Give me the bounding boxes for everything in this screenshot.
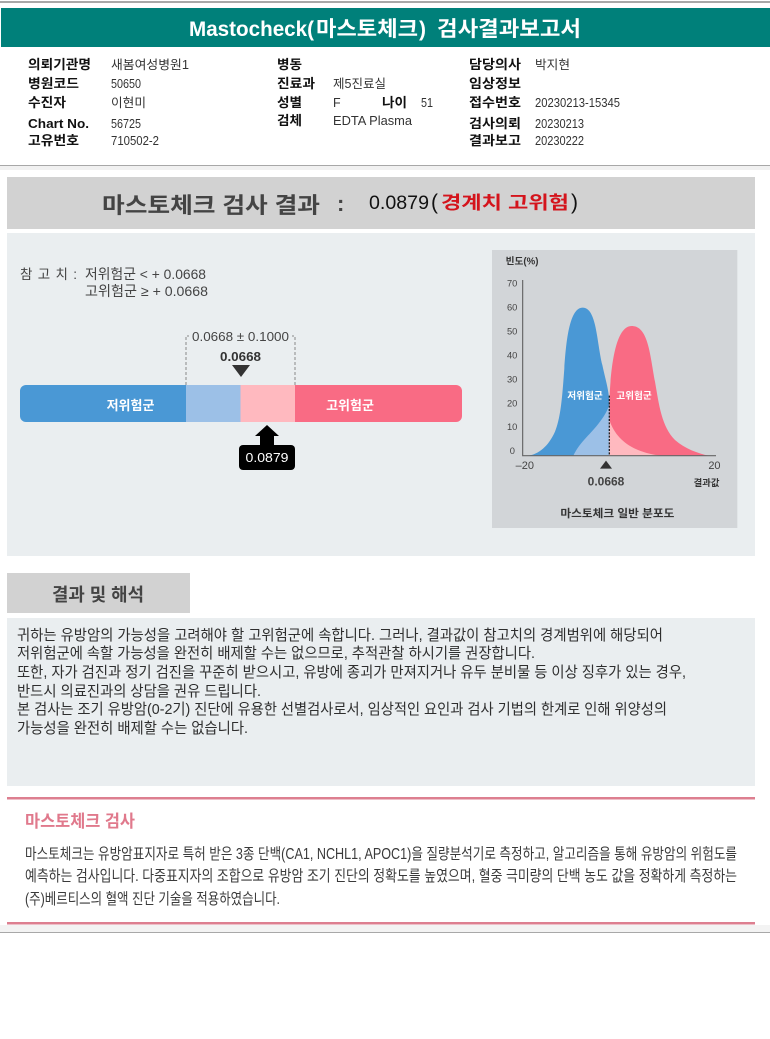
cutoff label — [588, 461, 625, 488]
result heading bar — [7, 177, 755, 229]
cutoff dotted line — [607, 396, 611, 456]
patient information table: 20230213 — [535, 117, 584, 131]
title banner — [1, 8, 770, 47]
distribution chart — [492, 250, 737, 528]
patient information table: 제5진료실 — [333, 77, 386, 91]
patient information table: 20230222 — [535, 134, 584, 148]
patient information table: Chart No. — [28, 116, 89, 131]
result marker arrow: 0.0879 — [246, 450, 288, 465]
low risk curve — [528, 308, 609, 456]
patient information table: 박지현 — [535, 58, 570, 72]
reference values text: 저위험군 < + 0.0668 — [85, 266, 206, 282]
about description: (주)베르티스의 혈액 진단 기술을 적용하였습니다. — [25, 890, 280, 908]
interpretation text panel — [7, 618, 755, 786]
high risk overlap — [609, 420, 660, 456]
title banner: Mastocheck( — [189, 18, 314, 41]
patient information table: 51 — [421, 96, 433, 110]
patient information table: 검사의뢰 — [469, 116, 521, 131]
curve labels: 저위험군 — [567, 390, 603, 402]
y axis labels: 0 — [510, 446, 515, 456]
interpretation text panel: 귀하는 유방암의 가능성을 고려해야 할 고위험군에 속합니다. 그러나, 결과값이 참고치의 경계범위에 해당되어 — [17, 627, 663, 644]
axis titles: –20 — [516, 460, 534, 472]
y axis labels: 20 — [507, 398, 517, 408]
cutoff label: 0.0668 — [588, 474, 625, 488]
y axis labels: 30 — [507, 374, 517, 384]
patient information table: 50650 — [111, 77, 141, 91]
result heading bar: 마스토체크 검사 결과 — [102, 193, 320, 218]
patient information table — [28, 57, 620, 148]
cutoff marker: 0.0668 — [220, 349, 261, 364]
patient information table: 검체 — [277, 113, 302, 128]
result heading bar: : — [337, 191, 344, 216]
title banner: 마스토체크 — [316, 18, 418, 41]
about description — [25, 845, 737, 908]
axis titles: 결과값 — [694, 477, 720, 488]
title banner: 검사결과보고서 — [437, 18, 581, 41]
low risk overlap — [573, 404, 609, 456]
patient information table: 20230213-15345 — [535, 96, 620, 110]
interpretation heading: 결과 및 해석 — [52, 585, 144, 605]
risk scale bar: 고위험군 — [326, 398, 374, 413]
patient information table: 56725 — [111, 117, 141, 131]
y axis labels: 50 — [507, 327, 517, 337]
about heading: 마스토체크 검사 — [25, 812, 135, 831]
patient information table: 병동 — [277, 57, 302, 72]
result marker arrow — [239, 425, 295, 470]
borderline range bracket — [186, 329, 295, 385]
patient information table: 임상정보 — [469, 76, 521, 91]
interpretation heading — [7, 573, 190, 613]
axis titles — [506, 256, 721, 488]
result heading bar: ( — [431, 191, 438, 214]
cutoff marker — [220, 349, 261, 377]
distribution chart: 고위험군 — [616, 390, 652, 402]
reference values text: 참 고 치 : — [20, 267, 77, 282]
interpretation text panel: 저위험군에 속할 가능성을 완전히 배제할 수는 없으므로, 추적관찰 하시기를 권장합니다. — [17, 645, 535, 662]
axis titles: 20 — [708, 460, 721, 472]
reference values text: 고위험군 ≥ + 0.0668 — [85, 283, 208, 299]
patient information table: 결과보고 — [469, 133, 521, 148]
y axis labels: 70 — [507, 279, 517, 289]
axis titles: 빈도(%) — [506, 256, 538, 268]
y axis labels — [507, 279, 517, 456]
interpretation text panel: 가능성을 완전히 배제할 수는 없습니다. — [17, 720, 248, 737]
patient information table: 병원코드 — [28, 76, 79, 91]
patient information table: 이현미 — [111, 96, 146, 110]
patient information table: 710502-2 — [111, 134, 159, 148]
y axis labels: 60 — [507, 303, 517, 313]
interpretation text panel: 본 검사는 조기 유방암(0-2기) 진단에 유용한 선별검사로서, 임상적인 요인과 검사 기법의 한계로 인해 위양성의 — [17, 701, 667, 718]
patient information table: 성별 — [277, 95, 302, 110]
patient information table: 의뢰기관명 — [28, 57, 91, 72]
result heading bar: 경계치 고위험 — [441, 193, 569, 213]
patient information table: 고유번호 — [28, 133, 79, 148]
patient information table: 접수번호 — [469, 95, 521, 110]
high risk curve — [609, 326, 708, 456]
interpretation text panel: 또한, 자가 검진과 정기 검진을 꾸준히 받으시고, 유방에 종괴가 만져지거나 유두 분비물 등 이상 징후가 있는 경우, — [17, 664, 686, 681]
borderline range bracket: 0.0668 ± 0.1000 — [192, 329, 289, 344]
title banner: ) — [419, 18, 426, 41]
chart caption: 마스토체크 일반 분포도 — [560, 507, 675, 520]
axes — [523, 280, 716, 456]
panel: result scale and distribution — [7, 233, 755, 556]
patient information table: F — [333, 96, 341, 110]
risk scale bar — [20, 385, 462, 422]
patient information table: 새봄여성병원1 — [111, 58, 189, 72]
interpretation text panel: 반드시 의료진과의 상담을 권유 드립니다. — [17, 683, 261, 700]
y axis labels: 40 — [507, 351, 517, 361]
patient information table: EDTA Plasma — [333, 114, 412, 128]
risk scale bar: 저위험군 — [107, 398, 154, 413]
result heading bar: 0.0879 — [369, 193, 429, 214]
patient information table: 수진자 — [28, 95, 66, 110]
result heading bar: ) — [571, 191, 578, 214]
patient information table: 담당의사 — [469, 57, 521, 72]
patient information table: 나이 — [382, 95, 407, 110]
patient information table: 진료과 — [277, 76, 315, 91]
reference values text — [20, 266, 208, 299]
y axis labels: 10 — [507, 422, 517, 432]
panel: about the test — [7, 797, 755, 924]
